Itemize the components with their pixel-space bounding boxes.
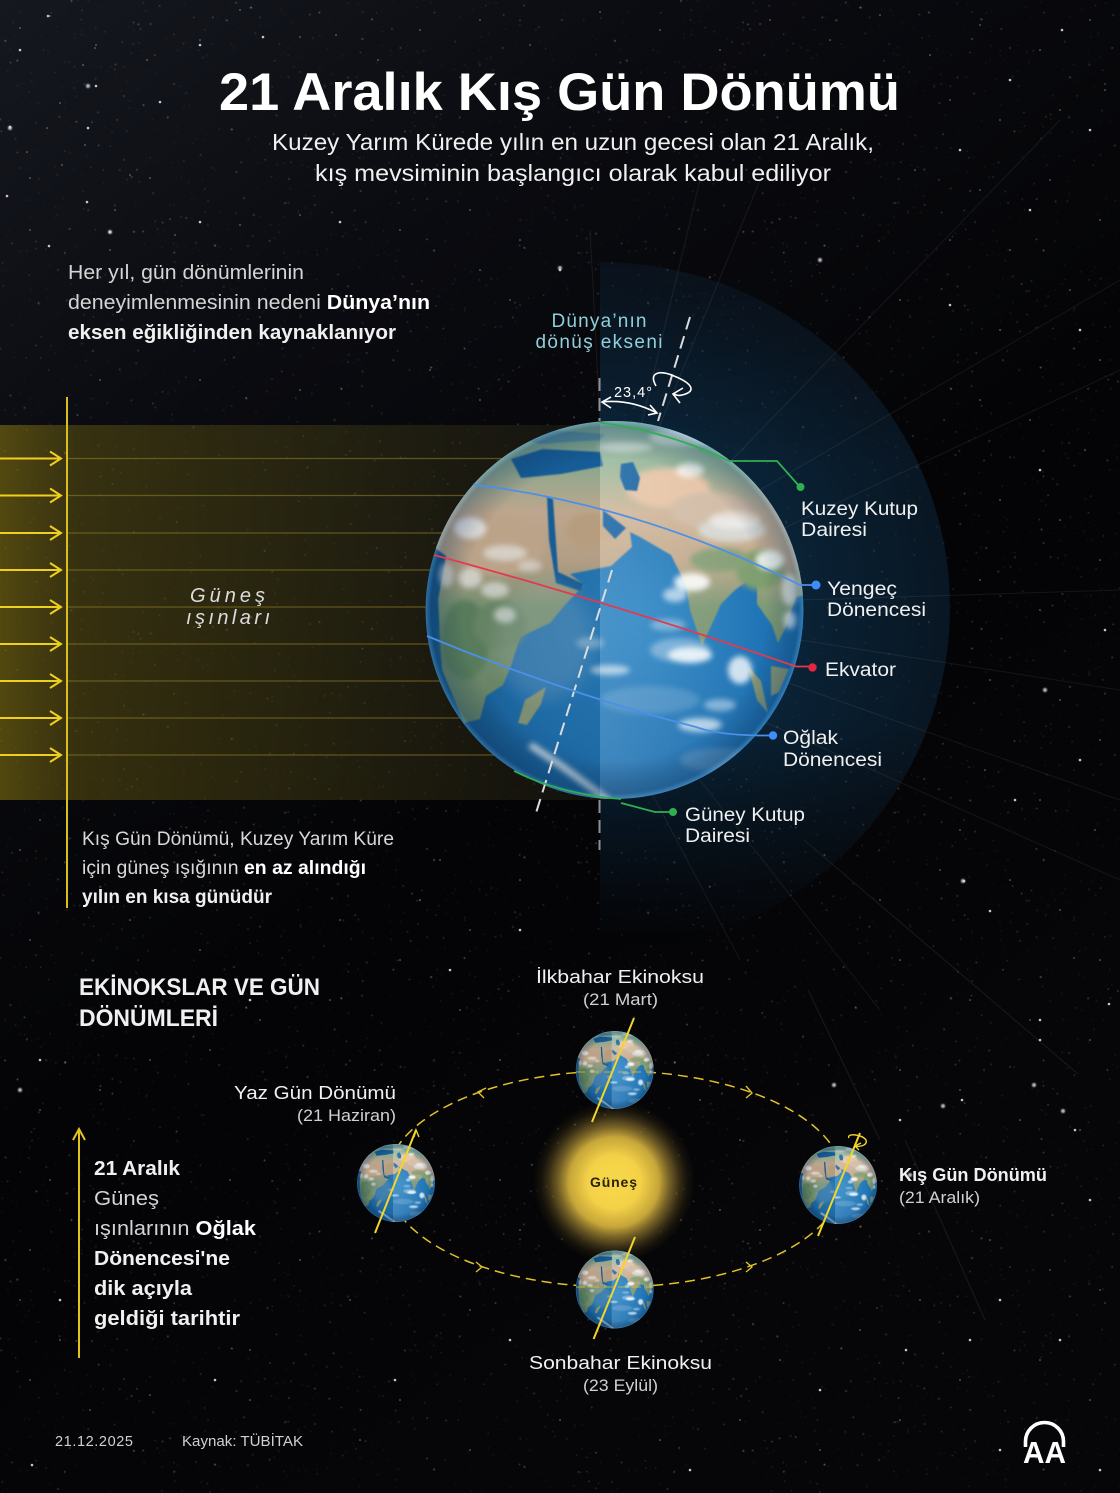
sun rays band [0, 425, 600, 800]
orbit segments over earths [576, 1072, 653, 1287]
earth: winter solstice [794, 1142, 882, 1224]
text block: axis tilt explanation: Her yıl, gün dönümlerinin [68, 262, 304, 284]
labels: latitude circles: Dairesi [685, 826, 750, 847]
earth: autumn equinox [570, 1246, 659, 1329]
labels: latitude circles: Dönencesi [783, 750, 882, 771]
labels: latitude circles: Güney Kutup [685, 805, 805, 826]
title: 21 Aralık Kış Gün Dönümü [219, 63, 900, 122]
label: rotation axis [536, 311, 662, 353]
text block: axis tilt explanation [68, 262, 430, 344]
text block: 21 December: Güneş [94, 1188, 159, 1210]
capricorn line [427, 636, 773, 736]
ray lines [68, 458, 535, 755]
rotation axes [536, 317, 690, 850]
arrow: yellow up arrow [73, 1129, 85, 1358]
footer: date and source: 21.12.2025 [55, 1434, 133, 1450]
footer: date and source: Kaynak: TÜBİTAK [182, 1432, 303, 1450]
label: sun rays: Güneş [190, 585, 265, 607]
antarctic circle line [514, 771, 673, 812]
labels: latitude circles [685, 499, 926, 847]
text block: 21 December: Dönencesi'ne [94, 1248, 230, 1270]
tilt angle 23.4: 23,4° [614, 385, 652, 401]
text block: shortest day: yılın en kısa günüdür [82, 887, 273, 908]
label: rotation axis: Dünya’nın [552, 311, 646, 332]
sun [532, 1100, 696, 1264]
heading: equinoxes and solstices: DÖNÜMLERİ [79, 1005, 218, 1032]
text block: axis tilt explanation: deneyimlenmesinin nedeni Dünya’nın [68, 292, 430, 314]
tilt angle 23.4 [602, 373, 691, 415]
subtitle [272, 129, 874, 186]
yellow earth axes [375, 1018, 866, 1339]
icon: large earth [400, 400, 830, 800]
footer: date and source [55, 1432, 303, 1450]
label: sun: Güneş [590, 1174, 637, 1190]
labels: orbit positions: (21 Aralık) [899, 1189, 980, 1207]
labels: orbit positions: Kış Gün Dönümü [899, 1165, 1047, 1185]
light halo of the earth (night side) [590, 120, 1120, 1010]
text block: shortest day: için güneş ışığının en az alındığı [82, 858, 366, 879]
labels: orbit positions [234, 966, 1047, 1395]
labels: latitude circles: Dairesi [801, 520, 867, 541]
logo: AA: AA [1023, 1435, 1066, 1470]
equator line [434, 555, 812, 666]
labels: orbit positions: İlkbahar Ekinoksu [536, 966, 704, 987]
labels: orbit positions: (21 Mart) [583, 991, 658, 1009]
yellow vertical line [66, 397, 68, 908]
arctic circle line [600, 422, 800, 487]
text block: 21 December: 21 Aralık [94, 1158, 181, 1180]
text block: axis tilt explanation: eksen eğikliğinden kaynaklanıyor [68, 322, 396, 344]
text block: 21 December: geldiği tarihtir [94, 1308, 240, 1330]
orbit diagram [352, 1018, 882, 1339]
subtitle: kış mevsiminin başlangıcı olarak kabul ediliyor [315, 160, 831, 186]
labels: latitude circles: Dönencesi [827, 600, 926, 621]
label: sun rays [186, 585, 270, 629]
orbit arrowheads [476, 1086, 752, 1272]
earth: summer solstice [352, 1140, 440, 1222]
text block: shortest day: Kış Gün Dönümü, Kuzey Yarım Küre [82, 829, 394, 850]
cancer line [473, 484, 816, 585]
earth latitude lines [427, 422, 816, 812]
label: rotation axis: dönüş ekseni [536, 332, 662, 353]
orbit ellipse [387, 1071, 843, 1287]
labels: orbit positions: (23 Eylül) [583, 1377, 658, 1395]
labels: latitude circles: Yengeç [827, 579, 897, 600]
sun ray arrows [0, 452, 61, 762]
labels: orbit positions: (21 Haziran) [297, 1107, 396, 1125]
labels: orbit positions: Yaz Gün Dönümü [234, 1082, 396, 1103]
heading: equinoxes and solstices [79, 974, 320, 1032]
label: sun rays: ışınları [186, 607, 270, 629]
heading: equinoxes and solstices: EKİNOKSLAR VE GÜN [79, 974, 320, 1001]
earth: spring equinox [570, 1027, 659, 1109]
labels: latitude circles: Oğlak [783, 728, 839, 749]
text block: 21 December: ışınlarının Oğlak [94, 1218, 257, 1240]
marker dots [669, 483, 820, 816]
labels: orbit positions: Sonbahar Ekinoksu [529, 1352, 712, 1373]
labels: latitude circles: Kuzey Kutup [801, 499, 918, 520]
text block: shortest day [82, 829, 394, 908]
text block: 21 December: dik açıyla [94, 1278, 193, 1300]
labels: latitude circles: Ekvator [825, 660, 897, 681]
subtitle: Kuzey Yarım Kürede yılın en uzun gecesi olan 21 Aralık, [272, 129, 874, 155]
text block: 21 December [94, 1158, 257, 1330]
